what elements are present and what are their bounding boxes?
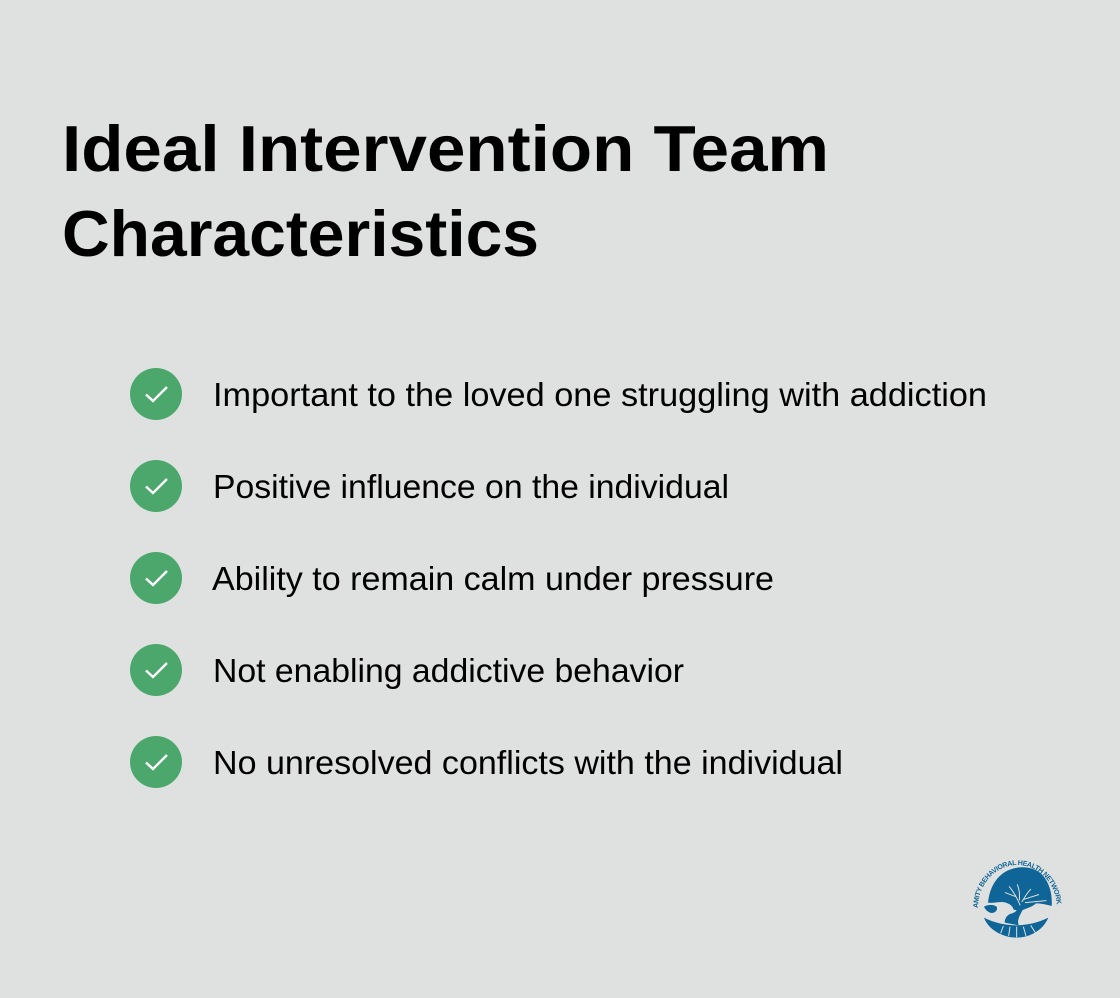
item 2: Positive influence on the individual [213, 468, 729, 505]
title: Characteristics [62, 197, 539, 270]
tree canopy [988, 867, 1052, 911]
item 5 [130, 736, 843, 788]
checklist [130, 368, 987, 788]
tree branches [1005, 885, 1046, 905]
root highlights [1001, 925, 1035, 937]
lower left foliage [984, 905, 997, 913]
tree trunk [1005, 906, 1024, 925]
item 1 [130, 368, 987, 420]
logo: tree emblem [973, 860, 1062, 938]
item 3 [130, 552, 774, 604]
item 1: Important to the loved one struggling with addiction [213, 376, 987, 413]
logo text: AMITY BEHAVIORAL HEALTH NETWORK [973, 860, 1062, 908]
item 4: Not enabling addictive behavior [213, 652, 684, 689]
item 5: No unresolved conflicts with the individual [213, 744, 843, 781]
title [62, 112, 829, 270]
item 2 [130, 460, 729, 512]
item 4 [130, 644, 684, 696]
title: Ideal Intervention Team [62, 112, 829, 185]
tree artwork [984, 867, 1052, 938]
item 3: Ability to remain calm under pressure [212, 560, 774, 597]
root bowl [984, 918, 1048, 938]
